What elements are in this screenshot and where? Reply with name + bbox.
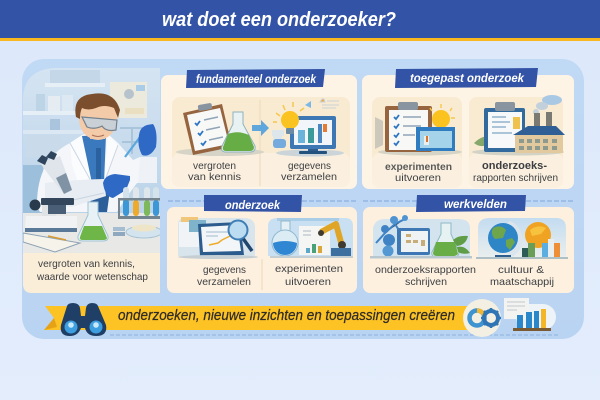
text: vergroten van kennis: van kennis	[188, 171, 241, 183]
icon: gears and bar chart	[463, 298, 556, 337]
heading: toegepast onderzoek	[410, 71, 525, 85]
text: cultuur en maatschappij: maatschappij	[490, 276, 554, 288]
text: experimenten uitvoeren: uitvoeren	[395, 172, 441, 184]
microscope	[40, 156, 69, 192]
header band	[0, 0, 600, 41]
text: onderzoeksrapporten schrijven: onderzoeksrapporten	[375, 264, 476, 276]
petri dishes	[126, 226, 162, 238]
text: cultuur en maatschappij	[490, 264, 554, 288]
panel: researcher	[23, 68, 162, 293]
text: onderzoeksrapporten schrijven	[473, 160, 558, 184]
caption: waarde voor wetenschap	[36, 271, 148, 283]
heading: onderzoek	[225, 198, 281, 212]
text: experimenten uitvoeren: experimenten	[385, 161, 452, 173]
text: onderzoeksrapporten schrijven: schrijven	[405, 276, 447, 288]
banner	[44, 298, 558, 337]
head	[90, 138, 105, 139]
heading	[204, 195, 302, 212]
text: gegevens verzamelen	[197, 264, 251, 288]
text: gegevens verzamelen: gegevens	[203, 264, 246, 276]
text: gegevens verzamelen: verzamelen	[197, 276, 251, 288]
caption card	[23, 253, 160, 293]
text: onderzoeksrapporten schrijven: onderzoeks-	[482, 160, 547, 172]
cards	[372, 97, 563, 188]
icon: binoculars	[61, 303, 106, 336]
notebook	[23, 233, 80, 252]
icon: report and factory	[472, 95, 565, 156]
text: experimenten uitvoeren: experimenten	[275, 263, 343, 275]
icon: light bulb and monitor	[272, 99, 344, 156]
icon: monitor with magnifier	[178, 217, 258, 259]
panel: onderzoek	[167, 195, 357, 293]
text: gegevens verzamelen	[281, 160, 337, 183]
gloves	[138, 124, 157, 156]
banner text: onderzoeken, nieuwe inzichten en toepassingen creëren	[118, 307, 455, 324]
lab coat	[37, 134, 140, 212]
arrow	[252, 120, 269, 136]
icon: flask and robot arm	[268, 218, 353, 258]
text: vergroten van kennis	[188, 160, 241, 183]
sleeve	[45, 179, 106, 207]
text: vergroten van kennis: vergroten	[193, 160, 236, 172]
text: experimenten uitvoeren	[275, 263, 343, 288]
heading	[186, 69, 325, 88]
caption	[36, 258, 148, 283]
heading	[416, 195, 526, 212]
test tube rack	[123, 187, 129, 202]
shirt	[82, 135, 106, 183]
icon: globe, sphere and bars	[476, 218, 568, 259]
goggles	[82, 117, 117, 130]
text: cultuur en maatschappij: cultuur &	[498, 264, 544, 276]
heading: werkvelden	[444, 197, 507, 211]
table	[23, 213, 160, 254]
caption: vergroten van kennis,	[38, 258, 135, 270]
text: onderzoeksrapporten schrijven: rapporten schrijven	[473, 173, 558, 184]
text: onderzoeksrapporten schrijven	[375, 264, 476, 288]
text: experimenten uitvoeren	[385, 161, 452, 184]
text: gegevens verzamelen: gegevens	[288, 160, 331, 172]
text: experimenten uitvoeren: uitvoeren	[285, 276, 331, 288]
pipette	[125, 137, 140, 157]
text: gegevens verzamelen: verzamelen	[281, 171, 337, 183]
panel: toegepast onderzoek	[362, 68, 574, 189]
heading: fundamenteel onderzoek	[196, 72, 317, 86]
flask	[78, 202, 108, 241]
panel: werkvelden	[363, 195, 574, 293]
icon: clipboard and flask	[176, 103, 264, 156]
heading	[395, 68, 538, 88]
illustration: scientist in lab	[23, 68, 162, 254]
panel: fundamenteel onderzoek	[161, 69, 357, 189]
main panel background	[22, 59, 584, 339]
icon: molecule, laptop and flask	[370, 215, 472, 258]
divider dashes	[168, 200, 575, 202]
icon: clipboard, bulb and book	[375, 102, 462, 156]
card	[172, 97, 350, 187]
title: wat doet een onderzoeker?	[162, 9, 396, 31]
